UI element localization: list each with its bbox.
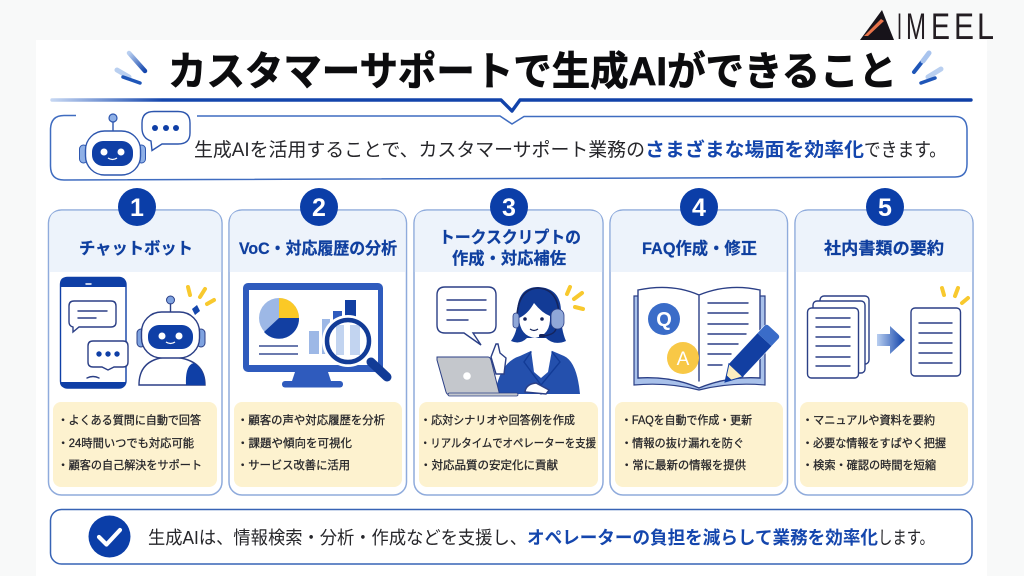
panel: 2 VoC analysis [229,188,406,495]
icon: documents summarised [808,288,968,378]
title underline with notch [52,100,971,111]
panel: 4 FAQ: 4 [692,194,706,222]
logo: E [954,6,974,47]
panel: 5 document summary: 5 [878,194,892,222]
feature list [615,402,783,487]
feature list: ・顧客の自己解決をサポート [58,458,202,472]
feature list: ・よくある質問に自動で回答 [58,413,201,427]
summary highlighted text: オペレーターの負担を減らして業務を効率化 [527,527,878,548]
icon: open book with pencil: Q [656,309,672,331]
icon: phone and robot [60,277,214,388]
feature list: ・必要な情報をすばやく把握 [802,436,946,450]
summary text: 生成AIは、情報検索・分析・作成などを支援し、 [148,528,527,548]
icon: check mark [88,516,130,558]
intro panel [50,112,967,180]
logo: L [977,6,994,47]
feature list: ・応対シナリオや回答例を作成 [420,413,575,427]
feature list: ・顧客の声や対応履歴を分析 [237,413,385,427]
icon: speech bubble and operator [437,287,583,396]
icon: robot with speech bubble [80,112,190,175]
feature list: ・リアルタイムでオペレーターを支援 [420,436,596,450]
logo: M [906,6,926,47]
heading: トークスクリプトの [439,228,581,247]
panel: 5 document summary [795,188,973,495]
panel: 2 VoC analysis: 2 [312,194,326,222]
icon: monitor and magnifier [243,283,387,388]
icon: open book with pencil: A [677,349,690,370]
feature list: ・検索・確認の時間を短縮 [802,458,936,472]
panel: 4 FAQ [610,188,788,495]
feature list: ・サービス改善に活用 [237,458,350,472]
feature list: ・24時間いつでも対応可能 [58,436,194,450]
icon: right sparks [914,53,941,83]
intro text end: できます。 [864,140,946,161]
feature list: ・情報の抜け漏れを防ぐ [621,436,744,450]
intro highlighted text: さまざまな場面を効率化 [645,138,864,161]
feature list [419,402,598,487]
heading: 社内書類の要約 [824,238,944,258]
feature list: ・FAQを自動で作成・更新 [621,413,752,427]
icon: left sparks [117,53,145,83]
heading [439,228,581,268]
logo: I [897,6,902,47]
panel: 1 chatbot [48,188,222,495]
summary text end: します。 [878,528,934,548]
feature list [800,402,968,487]
feature list: ・課題や傾向を可視化 [237,436,352,450]
panel: 1 chatbot: 1 [130,194,144,222]
summary panel [50,510,972,564]
feature list [234,402,402,487]
intro text: 生成AIを活用することで、カスタマーサポート業務の [194,139,645,161]
feature list: ・常に最新の情報を提供 [621,458,746,472]
panel: 3 talk script [414,188,603,495]
heading: FAQ作成・修正 [642,238,757,258]
icon: open book with pencil [634,287,781,390]
feature list: ・マニュアルや資料を要約 [802,413,935,427]
feature list [53,402,217,487]
heading: VoC・対応履歴の分析 [239,238,397,258]
logo [860,6,994,47]
title: カスタマーサポートで生成AIができること [168,50,897,94]
heading: チャットボット [79,239,193,258]
panel: 3 talk script: 3 [502,194,516,222]
feature list: ・対応品質の安定化に貢献 [420,458,558,472]
logo: E [931,6,950,47]
heading: 作成・対応補佐 [452,248,566,268]
